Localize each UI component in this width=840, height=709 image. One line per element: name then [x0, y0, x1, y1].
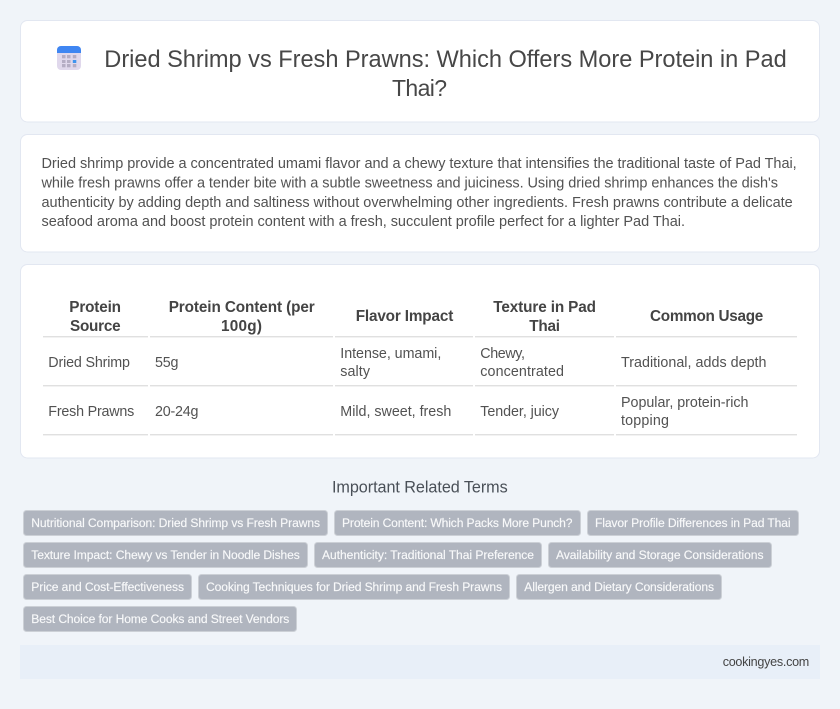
table header row: Thai	[529, 318, 560, 335]
panel: comparison table	[20, 264, 820, 458]
text block: intro paragraph: Dried shrimp provide a concentrated umami flavor and a chewy texture that intensifies the traditional taste of Pad Thai,	[42, 156, 797, 172]
text block: intro paragraph	[40, 156, 797, 230]
table row: fresh prawns: Tender, juicy	[480, 404, 560, 420]
footer bar	[20, 645, 820, 679]
table row: fresh prawns: topping	[621, 413, 669, 429]
tag: Protein Content: Which Packs More Punch?	[342, 516, 573, 530]
tag	[198, 574, 510, 600]
text block: intro paragraph: authenticity by adding depth and saltiness without overwhelming other ingredients. Fresh prawns contribute a delicate	[42, 195, 793, 211]
title: Thai?	[392, 75, 447, 101]
table row: fresh prawns	[43, 395, 797, 435]
tag	[24, 510, 328, 536]
tag	[24, 574, 192, 600]
tag: Authenticity: Traditional Thai Preference	[322, 548, 534, 562]
tag: Nutritional Comparison: Dried Shrimp vs Fresh Prawns	[31, 516, 320, 530]
heading: important related terms: Important Related Terms	[332, 479, 508, 497]
title: Dried Shrimp vs Fresh Prawns: Which Offers More Protein in Pad	[104, 47, 787, 73]
tag: Cooking Techniques for Dried Shrimp and Fresh Prawns	[206, 580, 502, 594]
table row: dried shrimp: Intense, umami,	[340, 346, 441, 362]
tag: Texture Impact: Chewy vs Tender in Noodle Dishes	[31, 548, 300, 562]
panel: intro text	[20, 134, 820, 252]
tag	[24, 542, 308, 568]
table row: dried shrimp: Chewy,	[480, 346, 525, 362]
table row: dried shrimp: Traditional, adds depth	[621, 355, 767, 371]
table row: dried shrimp: Dried Shrimp	[48, 355, 130, 371]
table row: fresh prawns: 20-24g	[155, 404, 199, 420]
table header row: Flavor Impact	[356, 308, 453, 325]
table row: dried shrimp: concentrated	[480, 364, 564, 380]
title	[104, 47, 787, 101]
tag: Best Choice for Home Cooks and Street Vendors	[31, 612, 289, 626]
footer source text: cookingyes.com	[723, 655, 809, 669]
tag	[516, 574, 722, 600]
tag: Allergen and Dietary Considerations	[524, 580, 714, 594]
tag	[588, 510, 798, 536]
tag: Availability and Storage Considerations	[556, 548, 764, 562]
tag	[334, 510, 580, 536]
table row: fresh prawns: Fresh Prawns	[48, 404, 134, 420]
tag: Price and Cost-Effectiveness	[31, 580, 184, 594]
table row: fresh prawns: Popular, protein-rich	[621, 395, 749, 411]
table header row: Texture in Pad	[493, 299, 596, 316]
text block: intro paragraph: seafood aroma and boost protein content with a fresh, succulent profile perfect for a lighter Pad Thai.	[42, 214, 685, 230]
table row: dried shrimp	[43, 346, 797, 386]
text block: intro paragraph: while fresh prawns offer a tender bite with a subtle sweetness and juiciness. Using dried shrimp enhances the dish's	[40, 176, 778, 192]
table header row: Common Usage	[650, 308, 763, 325]
panel: title card	[20, 20, 820, 122]
tag: Flavor Profile Differences in Pad Thai	[595, 516, 790, 530]
tag	[314, 542, 542, 568]
table header row: Protein Content (per	[169, 299, 315, 316]
table row: dried shrimp: 55g	[155, 355, 179, 371]
table header row: 100g)	[221, 318, 262, 335]
table header row: Source	[70, 318, 121, 335]
table row: fresh prawns: Mild, sweet, fresh	[340, 404, 451, 420]
table header row: Protein	[69, 299, 121, 316]
icon: calendar	[57, 46, 81, 70]
related term tags	[24, 510, 798, 632]
tag	[548, 542, 772, 568]
table header row	[43, 299, 797, 337]
tag	[24, 606, 296, 632]
table row: dried shrimp: salty	[340, 364, 371, 380]
